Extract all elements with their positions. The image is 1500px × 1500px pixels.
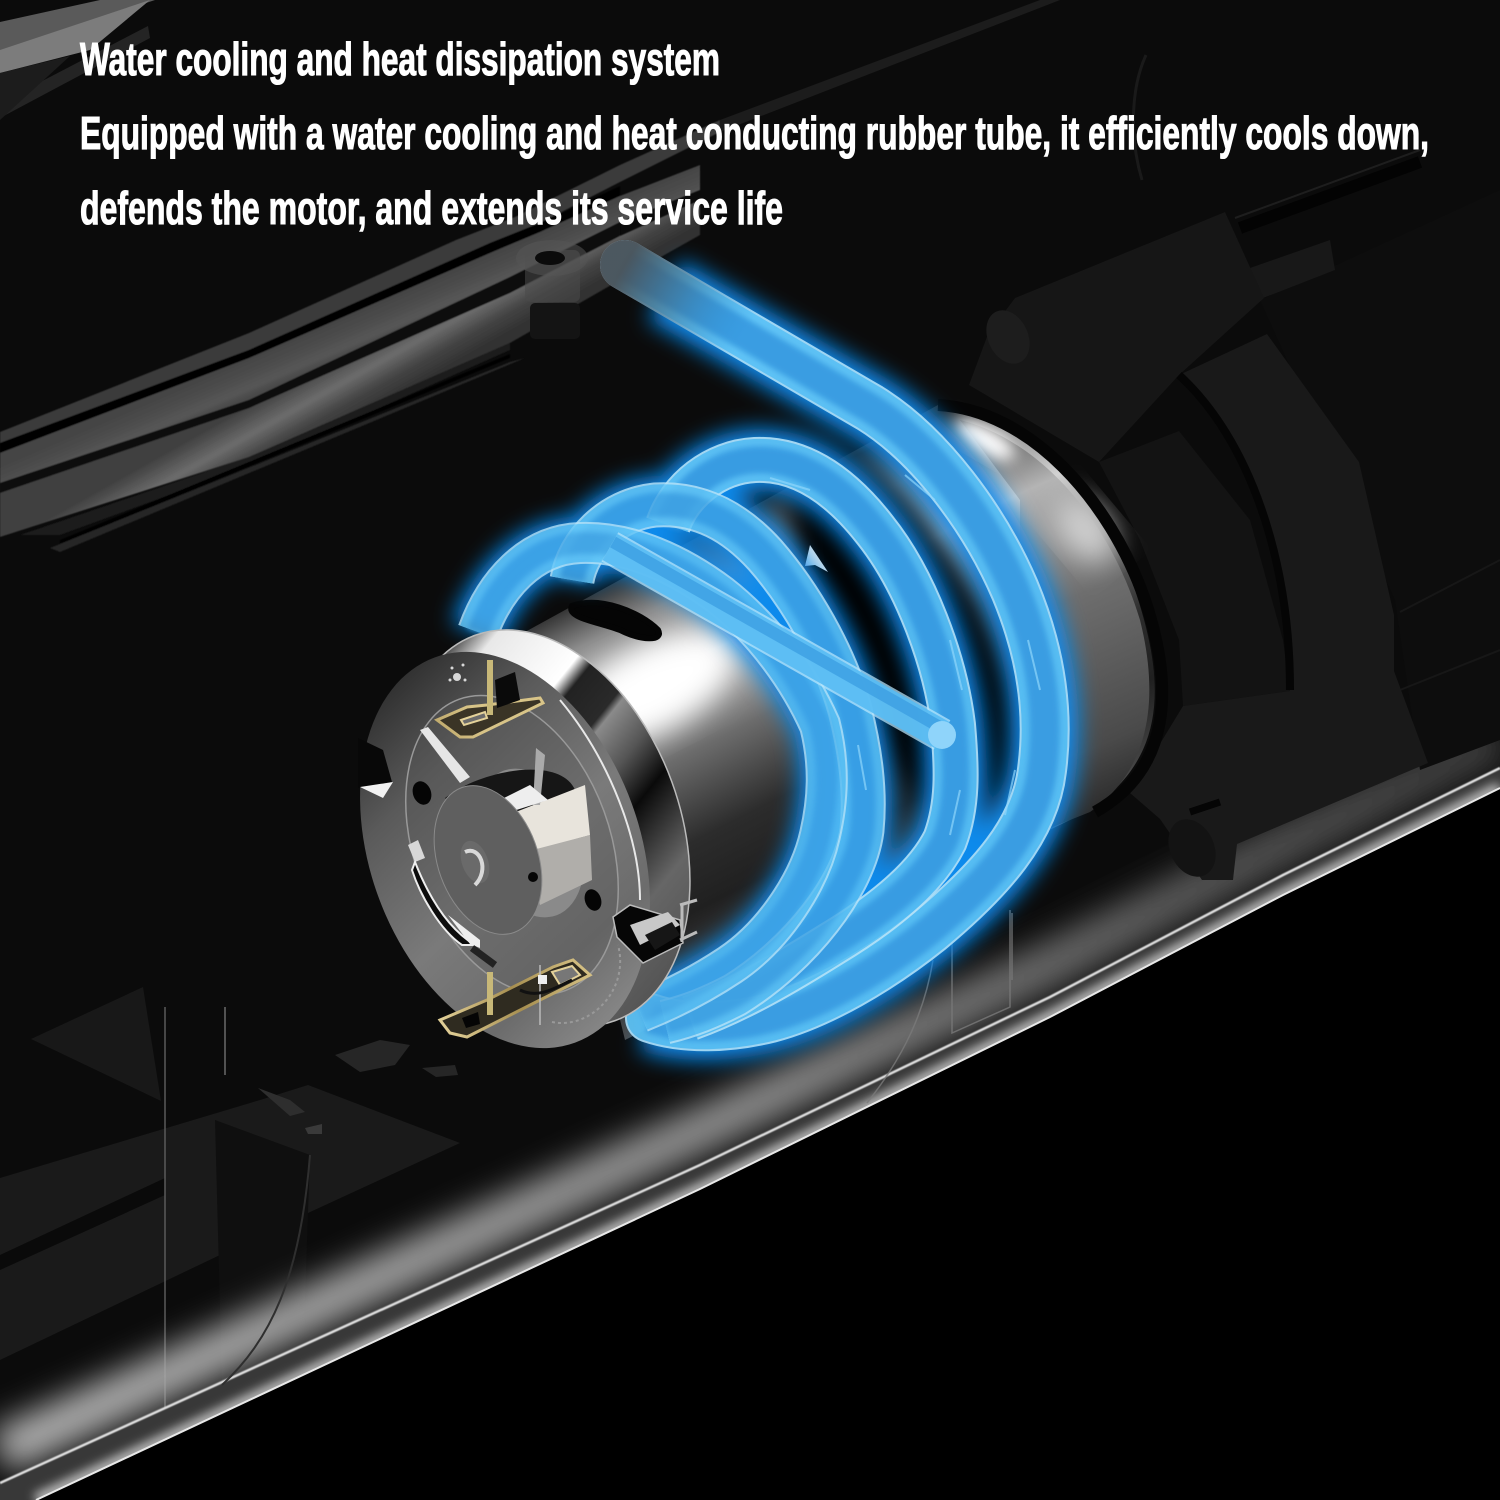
description line 2: defends the motor, and extends its service life bbox=[80, 182, 783, 234]
upper housing bands bbox=[0, 120, 720, 552]
bottom gold terminal bbox=[440, 960, 590, 1037]
lower right cut-out bbox=[613, 900, 697, 963]
tube glow bbox=[478, 290, 1045, 1026]
third coil ring bbox=[668, 460, 956, 1018]
lower-left housing panels bbox=[0, 987, 460, 1410]
outer coil tube with inlet bbox=[625, 265, 1045, 1026]
tube inlet fade bbox=[625, 265, 745, 335]
motor end cap bbox=[308, 589, 742, 1089]
straight inner tube bbox=[610, 542, 956, 749]
second coil ring bbox=[572, 505, 863, 1022]
holes bbox=[409, 779, 604, 913]
lower contact strip bbox=[408, 840, 495, 965]
motor centre cap bbox=[415, 771, 561, 949]
rear housing details bbox=[1133, 55, 1500, 770]
faint upper-right housing streak bbox=[720, 0, 1060, 132]
left notch bbox=[358, 738, 393, 798]
heading and description text bbox=[80, 33, 1429, 234]
motor mounting clamp bbox=[969, 212, 1428, 884]
white contact strip bbox=[420, 727, 470, 783]
face edge highlight bbox=[560, 700, 640, 900]
heading line: Water cooling and heat dissipation system bbox=[80, 33, 720, 85]
first coil ring bbox=[478, 543, 827, 1012]
inner ring line bbox=[367, 666, 657, 1024]
chrome rim bbox=[348, 589, 742, 1067]
faint inner lines under coil bbox=[867, 910, 1012, 1103]
tube connector bracket bbox=[516, 240, 588, 339]
top-left corner streaks bbox=[0, 0, 155, 120]
motor cylinder body bbox=[525, 405, 1162, 1040]
face plate bbox=[308, 611, 702, 1089]
top gold terminal bbox=[437, 660, 543, 737]
water cooling tube coil bbox=[478, 265, 1045, 1026]
lower body rim light bbox=[0, 738, 1500, 1500]
chrome barrel bbox=[445, 748, 603, 932]
screw dots bbox=[448, 664, 466, 682]
shaft bbox=[455, 837, 495, 887]
bottom stamped marks bbox=[552, 945, 620, 1023]
tube surface streaks bbox=[770, 475, 1040, 835]
